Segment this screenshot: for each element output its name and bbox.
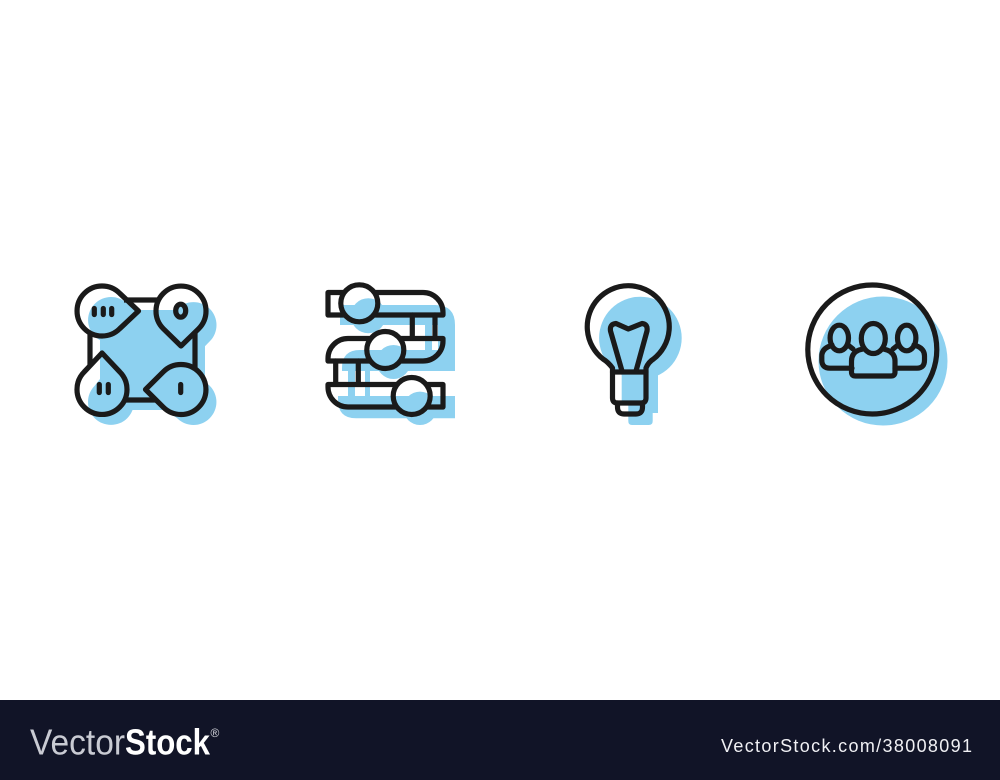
person: left bbox=[822, 325, 853, 368]
square outline bbox=[90, 300, 195, 400]
slider knob: top bbox=[338, 282, 380, 324]
icon: slider controls bbox=[328, 285, 455, 425]
image id: VectorStock.com/38008091 bbox=[721, 736, 972, 756]
slider connectors bbox=[336, 315, 435, 384]
blue offset silhouette: bulb bbox=[599, 297, 682, 425]
bulb base bbox=[612, 372, 646, 403]
icon: light bulb bbox=[587, 286, 682, 425]
slider bar: middle bbox=[328, 338, 443, 361]
pin: bottom left, two bars bbox=[77, 353, 127, 414]
pin: top right, ring bbox=[156, 286, 206, 346]
blue offset disc bbox=[818, 296, 948, 426]
icon: four map pins on a square bbox=[77, 286, 216, 425]
registered mark: ® bbox=[210, 726, 220, 740]
blue offset silhouette: sliders bbox=[338, 298, 455, 425]
slider bar: bottom bbox=[328, 384, 443, 407]
footer bar bbox=[0, 700, 1000, 780]
person: centre bbox=[852, 324, 895, 376]
bulb filament bbox=[610, 324, 647, 371]
slider bar: top bbox=[328, 292, 443, 315]
logo wordmark: VectorStock bbox=[30, 722, 211, 762]
slider knob: bottom bbox=[390, 374, 433, 418]
blue offset silhouette: pins and square bbox=[88, 297, 216, 425]
outer ring bbox=[808, 285, 937, 414]
icon: team in a circle bbox=[808, 285, 948, 426]
bulb glass bbox=[587, 286, 669, 372]
bulb cap bbox=[618, 403, 642, 414]
person: right bbox=[893, 325, 924, 368]
slider knob: middle bbox=[364, 328, 406, 372]
pin: top left, three bars bbox=[77, 286, 138, 336]
pin: bottom right, one bar bbox=[146, 365, 206, 414]
